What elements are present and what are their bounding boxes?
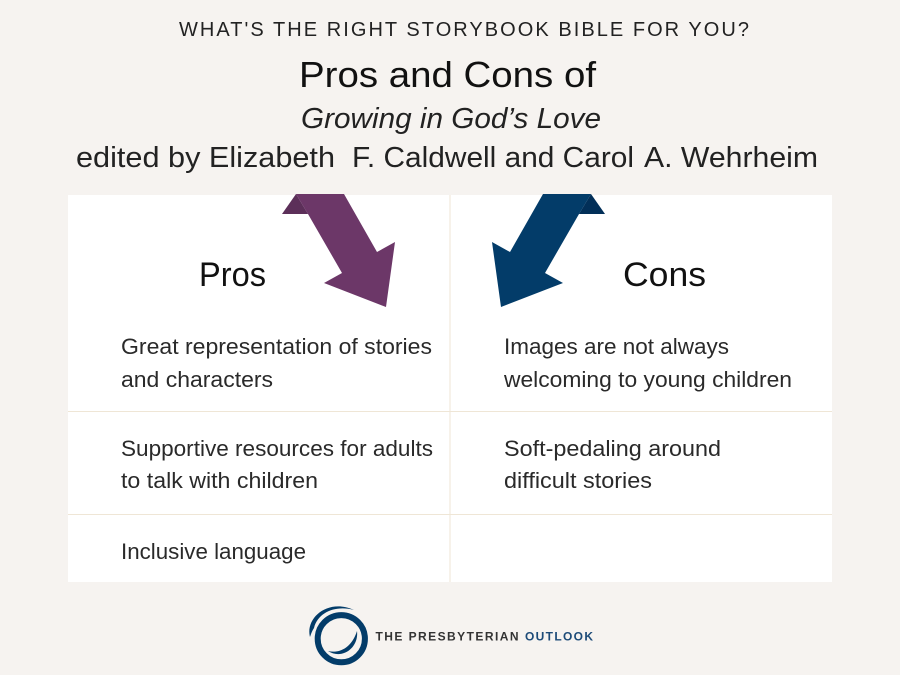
logo: The Presbyterian Outlook: OUTLOOK — [525, 630, 593, 644]
pro item 3: Inclusive language — [121, 539, 306, 564]
heading: pros: Pros — [199, 256, 266, 294]
con item 2 — [504, 436, 721, 493]
con item 1 — [503, 334, 792, 392]
pro item 2: Supportive resources for adults — [121, 436, 433, 461]
panel: comparison table — [68, 195, 832, 582]
wordmark: THE PRESBYTERIAN — [376, 630, 518, 644]
icon: ring logo — [309, 606, 365, 662]
eyebrow heading: WHAT'S THE RIGHT STORYBOOK BIBLE FOR YOU? — [179, 19, 749, 41]
con item 2: difficult stories — [504, 468, 652, 493]
con item 1: Images are not always — [504, 334, 729, 359]
pro item 1: Great representation of stories — [121, 334, 432, 359]
con item 2: Soft-pedaling around — [504, 436, 721, 461]
arrow: purple pointing to pros — [282, 194, 395, 307]
pro item 1: and characters — [121, 367, 273, 392]
title: Growing in God’s Love — [301, 103, 601, 135]
logo: The Presbyterian Outlook — [309, 606, 593, 662]
title — [76, 54, 818, 174]
title: F. Caldwell and Carol — [352, 142, 634, 174]
title: Pros and Cons of — [299, 54, 597, 95]
arrow: blue pointing to cons — [492, 194, 605, 307]
con item 1: welcoming to young children — [503, 367, 792, 392]
pro item 2 — [121, 436, 433, 493]
pro item 1 — [121, 334, 432, 392]
title: A. Wehrheim — [644, 142, 818, 174]
heading: cons: Cons — [623, 256, 706, 294]
pro item 2: to talk with children — [121, 468, 318, 493]
title: edited by Elizabeth — [76, 142, 335, 174]
